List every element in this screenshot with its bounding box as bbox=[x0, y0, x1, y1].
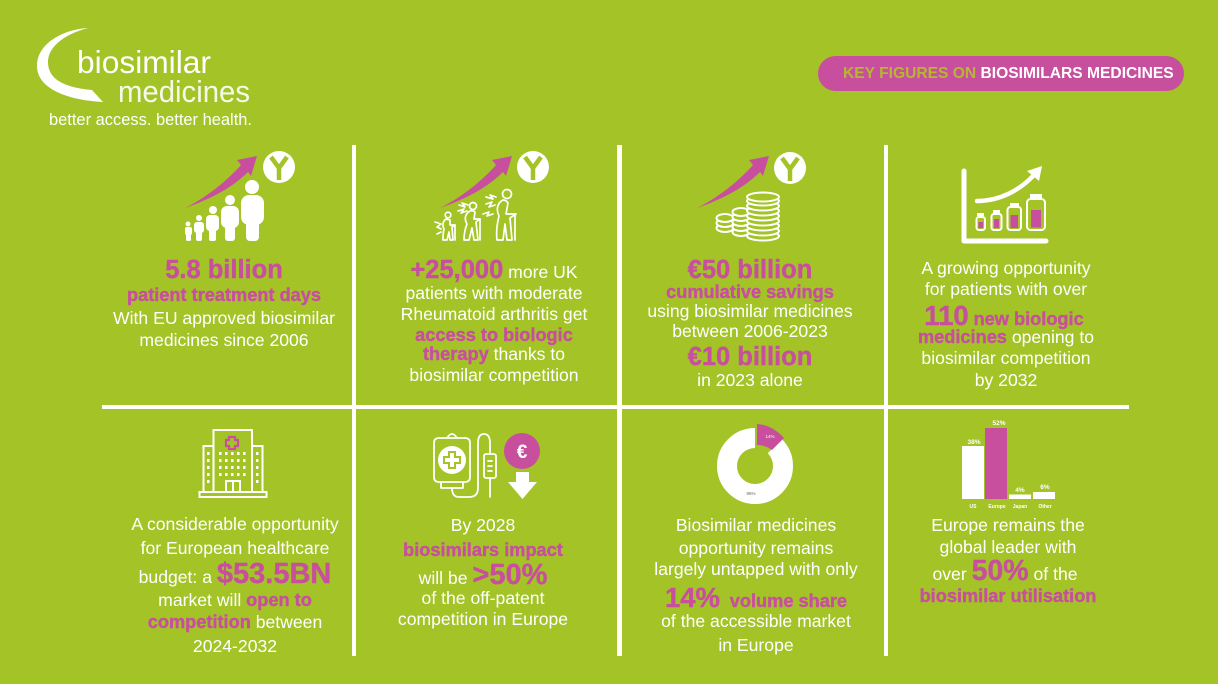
logo word medicines: medicines bbox=[118, 74, 250, 109]
text: 50 billion savings: between 2006-2023 bbox=[672, 321, 828, 341]
text: 50 billion savings bbox=[647, 256, 853, 390]
text: over 50 percent impact: biosimilars impact bbox=[403, 540, 563, 560]
icon: growing people with rising arrow and antibody bbox=[185, 151, 295, 241]
text: 110 new biologic medicines: medicines opening to bbox=[918, 327, 1094, 347]
panel: rheumatoid arthritis patients bbox=[401, 151, 588, 385]
heading pill bbox=[818, 56, 1184, 91]
text: 53.5BN market: competition between bbox=[148, 612, 322, 632]
chart: bar chart of biosimilar utilisation by region: Other bbox=[1038, 504, 1052, 510]
chart: bar chart of biosimilar utilisation by region: 38% bbox=[967, 439, 981, 446]
logo crescent bbox=[37, 28, 103, 102]
chart: donut 14 percent share: 14% bbox=[765, 434, 775, 439]
panel: patient treatment days bbox=[113, 151, 335, 350]
heading pill: KEY FIGURES ON BIOSIMILARS MEDICINES bbox=[843, 65, 1174, 82]
text: over 50 percent impact bbox=[398, 515, 568, 629]
icon: IV bag with euro falling: € bbox=[517, 442, 528, 463]
chart: bar chart of biosimilar utilisation by region: US bbox=[970, 504, 977, 510]
text: 5.8 billion: patient treatment days bbox=[127, 285, 321, 305]
logo word biosimilar: biosimilar bbox=[77, 44, 211, 80]
icon: chart with vials and rising arrow bbox=[962, 166, 1048, 244]
text: +25,000 more UK patients: Rheumatoid arthritis get bbox=[401, 304, 587, 324]
text: 14 percent volume share: 14% volume share bbox=[665, 582, 847, 613]
text: 14 percent volume share: largely untapped with only bbox=[654, 559, 858, 579]
logo bbox=[37, 28, 252, 129]
text: 110 new biologic medicines: for patients with over bbox=[925, 279, 1087, 299]
icon: hospital bbox=[198, 429, 268, 498]
text: 5.8 billion: 5.8 billion bbox=[165, 256, 283, 284]
text: 53.5BN market: 2024-2032 bbox=[193, 636, 277, 656]
chart: bar chart of biosimilar utilisation by region: 4% bbox=[1015, 487, 1025, 494]
icon: IV bag with euro falling bbox=[433, 433, 540, 499]
text: 5.8 billion bbox=[113, 256, 335, 350]
text: 14 percent volume share: of the accessible market bbox=[661, 611, 851, 631]
text: over 50 percent impact: By 2028 bbox=[451, 515, 515, 535]
text: 53.5BN market: for European healthcare bbox=[141, 538, 329, 558]
icon: coin stacks with rising arrow and antibody bbox=[697, 152, 806, 242]
chart: donut 14 percent share bbox=[717, 424, 793, 504]
chart: bar chart of biosimilar utilisation by region: 52% bbox=[992, 420, 1006, 427]
text: over 50 percent utilisation bbox=[920, 515, 1096, 606]
text: over 50 percent impact: will be >50% bbox=[419, 559, 547, 591]
panel: biosimilars impact bbox=[398, 433, 568, 629]
text: 14 percent volume share: opportunity remains bbox=[679, 538, 833, 558]
chart: donut 14 percent share: 86% bbox=[746, 491, 756, 496]
text: +25,000 more UK patients: patients with moderate bbox=[405, 283, 582, 303]
panel: European healthcare budget bbox=[131, 429, 339, 656]
text: +25,000 more UK patients: +25,000 more UK bbox=[410, 256, 578, 284]
panel: volume share bbox=[654, 424, 858, 655]
text: over 50 percent utilisation: Europe remains the bbox=[931, 515, 1085, 535]
chart: bar chart of biosimilar utilisation by region: Japan bbox=[1013, 504, 1027, 510]
text: 5.8 billion: medicines since 2006 bbox=[139, 330, 309, 350]
text: 110 new biologic medicines bbox=[918, 258, 1094, 390]
text: 110 new biologic medicines: by 2032 bbox=[975, 370, 1037, 390]
chart: bar chart of biosimilar utilisation by region: Europe bbox=[988, 504, 1006, 510]
text: 53.5BN market: market will open to bbox=[158, 590, 312, 610]
text: 53.5BN market: budget: a $53.5BN bbox=[139, 558, 331, 590]
chart: bar chart of biosimilar utilisation by region: 6% bbox=[1040, 484, 1050, 491]
text: 50 billion savings: using biosimilar medicines bbox=[647, 301, 853, 321]
text: 14 percent volume share bbox=[654, 515, 858, 655]
text: 14 percent volume share: Biosimilar medicines bbox=[676, 515, 836, 535]
text: 50 billion savings: cumulative savings bbox=[666, 282, 834, 302]
text: 110 new biologic medicines: biosimilar competition bbox=[921, 348, 1091, 368]
text: 53.5BN market bbox=[131, 514, 339, 656]
text: over 50 percent utilisation: global leader with bbox=[940, 537, 1076, 557]
text: 53.5BN market: A considerable opportunity bbox=[131, 514, 339, 534]
icon: elderly patients with rising arrow and antibody bbox=[434, 151, 549, 241]
text: 14 percent volume share: in Europe bbox=[718, 635, 794, 655]
text: +25,000 more UK patients: biosimilar competition bbox=[409, 365, 579, 385]
text: over 50 percent impact: of the off-patent bbox=[422, 588, 544, 608]
text: 50 billion savings: €10 billion bbox=[688, 343, 812, 371]
text: over 50 percent impact: competition in Europe bbox=[398, 609, 568, 629]
panel: cumulative savings bbox=[647, 152, 853, 390]
text: 50 billion savings: in 2023 alone bbox=[697, 370, 803, 390]
text: 50 billion savings: €50 billion bbox=[688, 256, 812, 284]
text: 110 new biologic medicines: A growing opportunity bbox=[921, 258, 1091, 278]
panel: growing opportunity bbox=[918, 166, 1094, 390]
text: 5.8 billion: With EU approved biosimilar bbox=[113, 308, 335, 328]
tagline: better access. better health. bbox=[49, 111, 252, 129]
text: +25,000 more UK patients: therapy thanks to bbox=[423, 344, 565, 364]
text: +25,000 more UK patients: access to biologic bbox=[415, 325, 573, 345]
text: +25,000 more UK patients bbox=[401, 256, 588, 385]
panel: global leader bbox=[920, 420, 1096, 606]
text: 110 new biologic medicines: 110 new biologic bbox=[924, 300, 1084, 331]
text: over 50 percent utilisation: biosimilar utilisation bbox=[920, 586, 1096, 606]
text: over 50 percent utilisation: over 50% of the bbox=[932, 555, 1078, 587]
chart: bar chart of biosimilar utilisation by region bbox=[962, 420, 1055, 510]
